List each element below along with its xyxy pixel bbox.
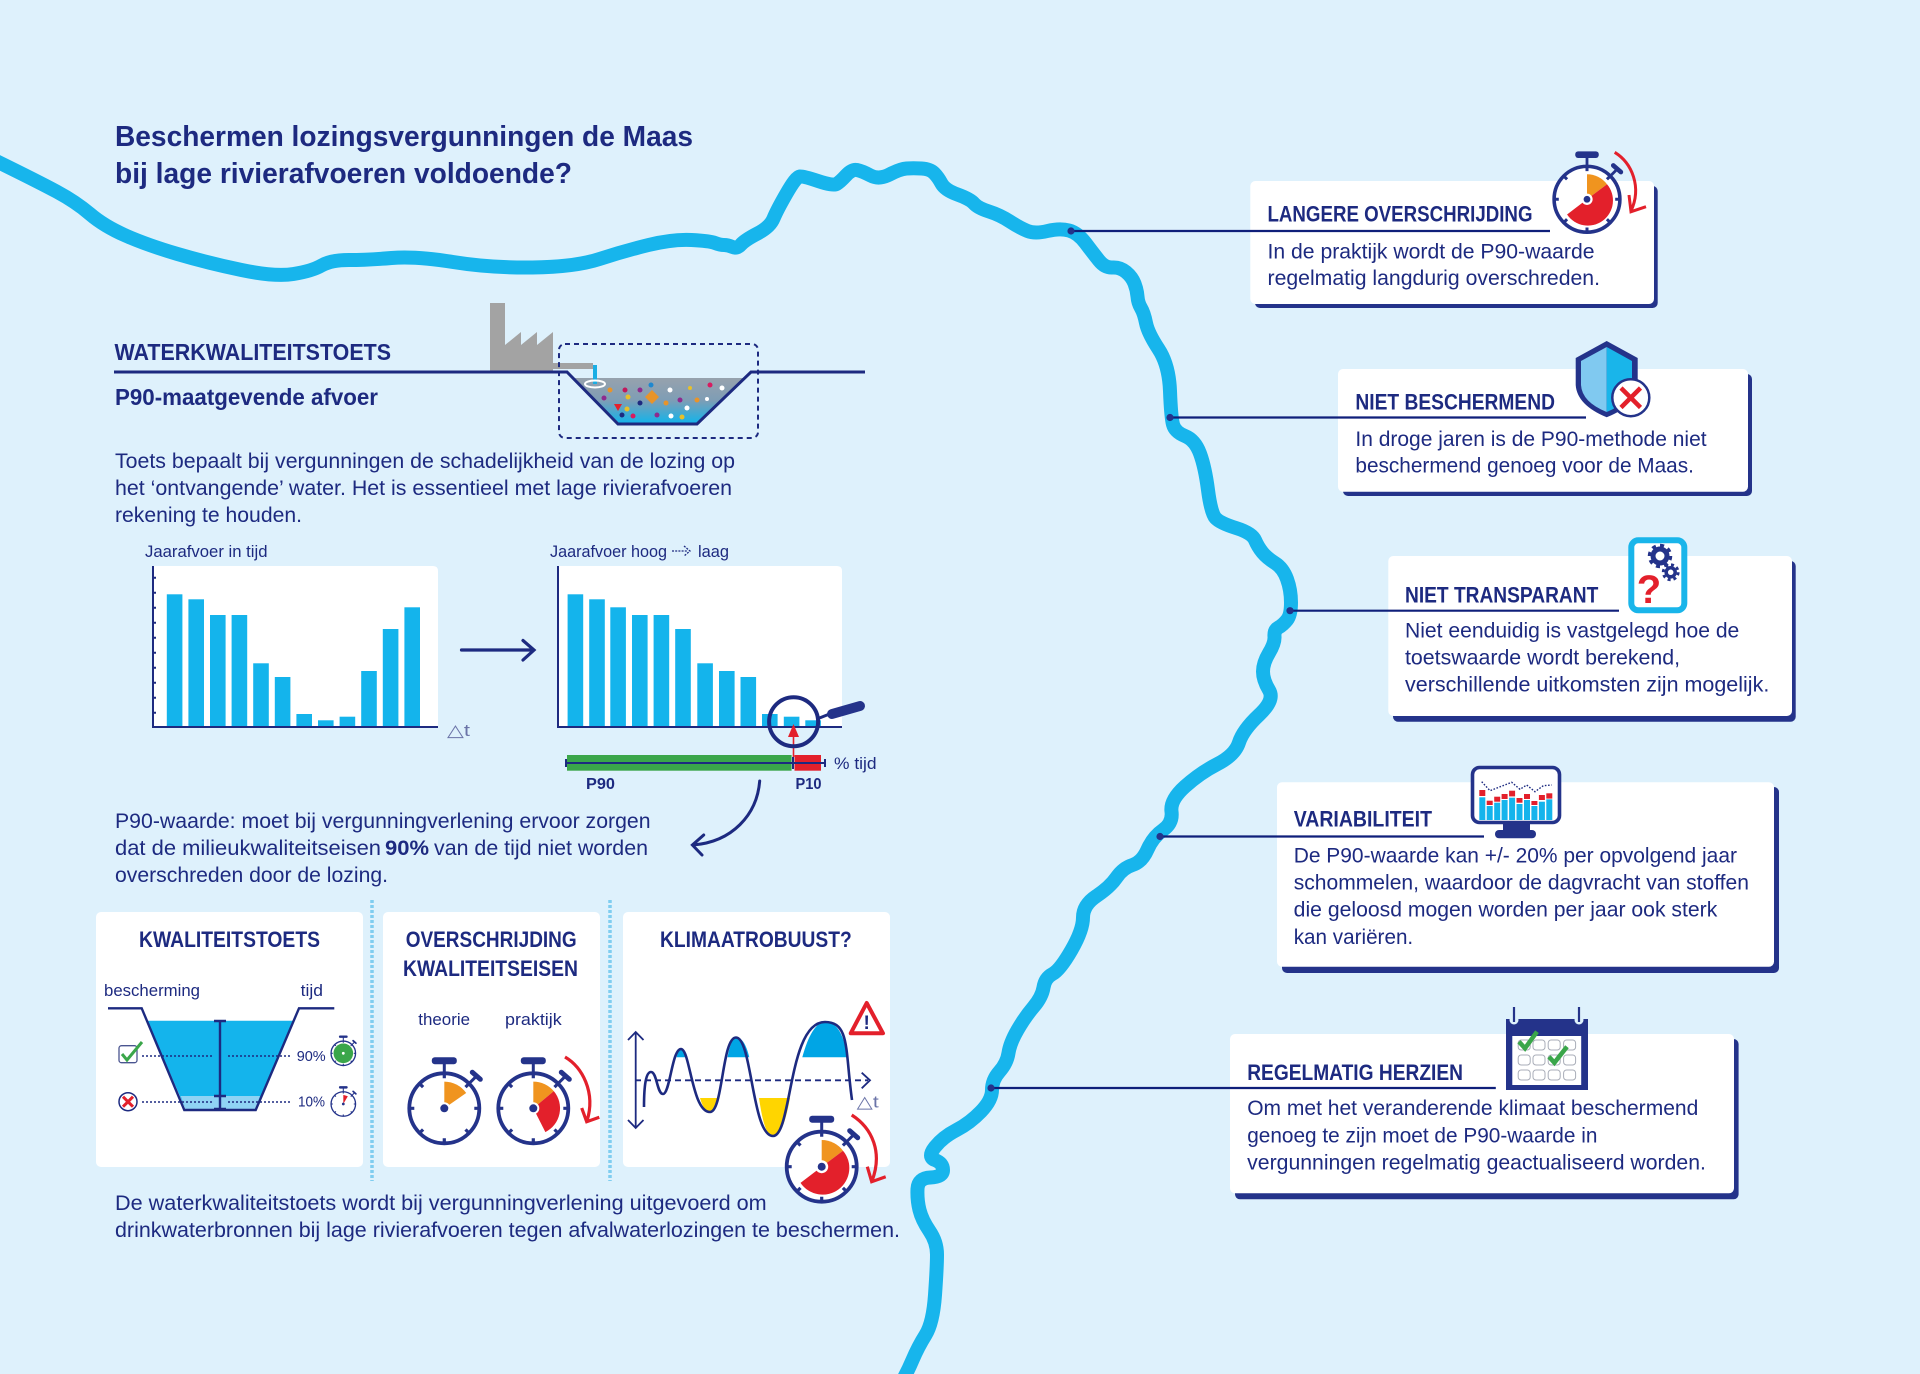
stopwatch: theorie (409, 1057, 480, 1143)
chart: Jaarafvoer hoog naar laag (550, 542, 842, 727)
card: niet beschermend: NIET BESCHERMEND (1355, 389, 1555, 414)
title: bij lage rivierafvoeren voldoende? (115, 158, 572, 190)
arrow: red time overrun (565, 1057, 599, 1122)
arrow between charts (462, 640, 534, 660)
card: regelmatig herzien (987, 1007, 1739, 1199)
dashed discharge box (559, 344, 758, 438)
connector line (1160, 835, 1484, 838)
icon: stopwatch (1554, 151, 1646, 232)
P90 / P10 bar with magnifier: P10 (796, 776, 822, 793)
heading: kwaliteitstoets: KWALITEITSTOETS (139, 927, 320, 952)
P90 / P10 bar with magnifier: % tijd (834, 754, 877, 773)
panel: klimaatrobuust (623, 912, 890, 1167)
chart: Jaarafvoer in tijd: △t (447, 721, 470, 740)
chart: Jaarafvoer hoog naar laag: laag (698, 542, 729, 561)
curved arrow (692, 781, 760, 855)
panel: overschrijding kwaliteitseisen: praktijk (505, 1010, 562, 1029)
card: regelmatig herzien: genoeg te zijn moet de P90-waarde in (1247, 1125, 1597, 1148)
card: niet transparant: Niet eenduidig is vastgelegd hoe de (1405, 619, 1739, 642)
closing text (115, 1192, 900, 1242)
card: niet transparant: verschillende uitkomsten zijn mogelijk. (1405, 674, 1769, 697)
icon: warning: ! (864, 1013, 870, 1034)
P90-waarde text: P90-waarde: moet bij vergunningverlening ervoor zorgen (115, 810, 651, 833)
heading: overschrijding kwaliteitseisen: KWALITEITSEISEN (403, 956, 578, 981)
P90 / P10 bar with magnifier (566, 697, 877, 793)
chart: Jaarafvoer in tijd: Jaarafvoer in tijd (145, 542, 268, 561)
river Maas (0, 158, 1291, 1374)
title: Beschermen lozingsvergunningen de Maas (115, 121, 693, 153)
card: niet transparant: NIET TRANSPARANT (1405, 582, 1599, 607)
card: langere overschrijding: In de praktijk wordt de P90-waarde (1268, 240, 1594, 263)
card: regelmatig herzien: vergunningen regelmatig geactualiseerd worden. (1247, 1151, 1706, 1174)
card: variabiliteit: De P90-waarde kan +/- 20% per opvolgend jaar (1294, 845, 1737, 868)
icon: factory (490, 303, 593, 372)
icon: shield (1576, 341, 1649, 417)
connector line (1170, 416, 1586, 419)
card: niet transparant (1286, 540, 1796, 722)
card: langere overschrijding: LANGERE OVERSCHRIJDING (1268, 202, 1532, 227)
card: variabiliteit: kan variëren. (1294, 926, 1413, 949)
card: variabiliteit: die geloosd mogen worden per jaar ook sterk (1294, 899, 1718, 922)
panel: klimaatrobuust: △t (857, 1092, 879, 1112)
panel: kwaliteitstoets: 10% (298, 1094, 325, 1110)
card: langere overschrijding (1067, 151, 1658, 308)
connector line (1290, 610, 1619, 612)
heading: overschrijding kwaliteitseisen (403, 927, 578, 981)
heading: overschrijding kwaliteitseisen: OVERSCHRIJDING (406, 927, 577, 952)
card: variabiliteit: VARIABILITEIT (1294, 807, 1432, 832)
P90 / P10 bar with magnifier: P90 (586, 776, 615, 793)
chart: Jaarafvoer hoog naar laag: Jaarafvoer hoog (550, 542, 667, 561)
intro text: rekening te houden. (115, 504, 302, 527)
card: niet transparant: toetswaarde wordt berekend, (1405, 646, 1680, 669)
panel: kwaliteitstoets: tijd (301, 981, 323, 1000)
icon: calendar (1506, 1007, 1588, 1090)
panel: kwaliteitstoets: bescherming (104, 981, 200, 1000)
P90-waarde text: van de tijd niet worden (434, 837, 648, 860)
card: niet beschermend (1166, 341, 1752, 496)
river cross-section with pollutants (114, 365, 865, 424)
card: variabiliteit: schommelen, waardoor de dagvracht van stoffen (1294, 871, 1749, 894)
panel: overschrijding kwaliteitseisen (383, 912, 600, 1167)
P90-waarde text (115, 810, 651, 887)
icon: monitor with bar chart (1472, 768, 1560, 838)
intro text: het ‘ontvangende’ water. Het is essentieel met lage rivierafvoeren (115, 477, 732, 500)
icon: document with gears and question mark (1631, 540, 1684, 612)
P90-waarde text: dat de milieukwaliteitseisen (115, 837, 381, 860)
connector line (1071, 230, 1550, 232)
card: niet beschermend: beschermend genoeg voor de Maas. (1355, 455, 1694, 478)
stopwatch: klimaat (787, 1115, 886, 1202)
connector line (991, 1087, 1496, 1089)
dotted dividers (372, 900, 610, 1181)
closing text: De waterkwaliteitstoets wordt bij vergunningverlening uitgevoerd om (115, 1192, 767, 1215)
icon: document with gears and question mark: ? (1637, 568, 1661, 612)
title (115, 121, 693, 190)
card: variabiliteit (1156, 768, 1779, 973)
card: regelmatig herzien: REGELMATIG HERZIEN (1247, 1060, 1463, 1085)
panel: kwaliteitstoets (96, 912, 363, 1167)
icon: warning (851, 1003, 883, 1034)
panel: overschrijding kwaliteitseisen: theorie (418, 1010, 470, 1029)
intro text: Toets bepaalt bij vergunningen de schadelijkheid van de lozing op (115, 450, 735, 473)
chart: Jaarafvoer in tijd (145, 542, 470, 740)
P90-waarde text: 90% (385, 837, 429, 860)
heading: waterkwaliteitstoets: WATERKWALITEITSTOETS (114, 339, 391, 365)
subheading: P90-maatgevende afvoer: P90-maatgevende afvoer (115, 384, 378, 410)
card: niet beschermend: In droge jaren is de P90-methode niet (1355, 428, 1707, 451)
card: langere overschrijding: regelmatig langdurig overschreden. (1268, 267, 1600, 290)
panel: kwaliteitstoets: 90% (297, 1048, 326, 1065)
heading: klimaatrobuust: KLIMAATROBUUST? (660, 927, 852, 952)
intro text (115, 450, 735, 527)
P90-waarde text: overschreden door de lozing. (115, 864, 388, 887)
card: regelmatig herzien: Om met het veranderende klimaat beschermend (1247, 1097, 1698, 1120)
stopwatch: praktijk (498, 1057, 569, 1143)
closing text: drinkwaterbronnen bij lage rivierafvoeren tegen afvalwaterlozingen te beschermen. (115, 1219, 900, 1242)
